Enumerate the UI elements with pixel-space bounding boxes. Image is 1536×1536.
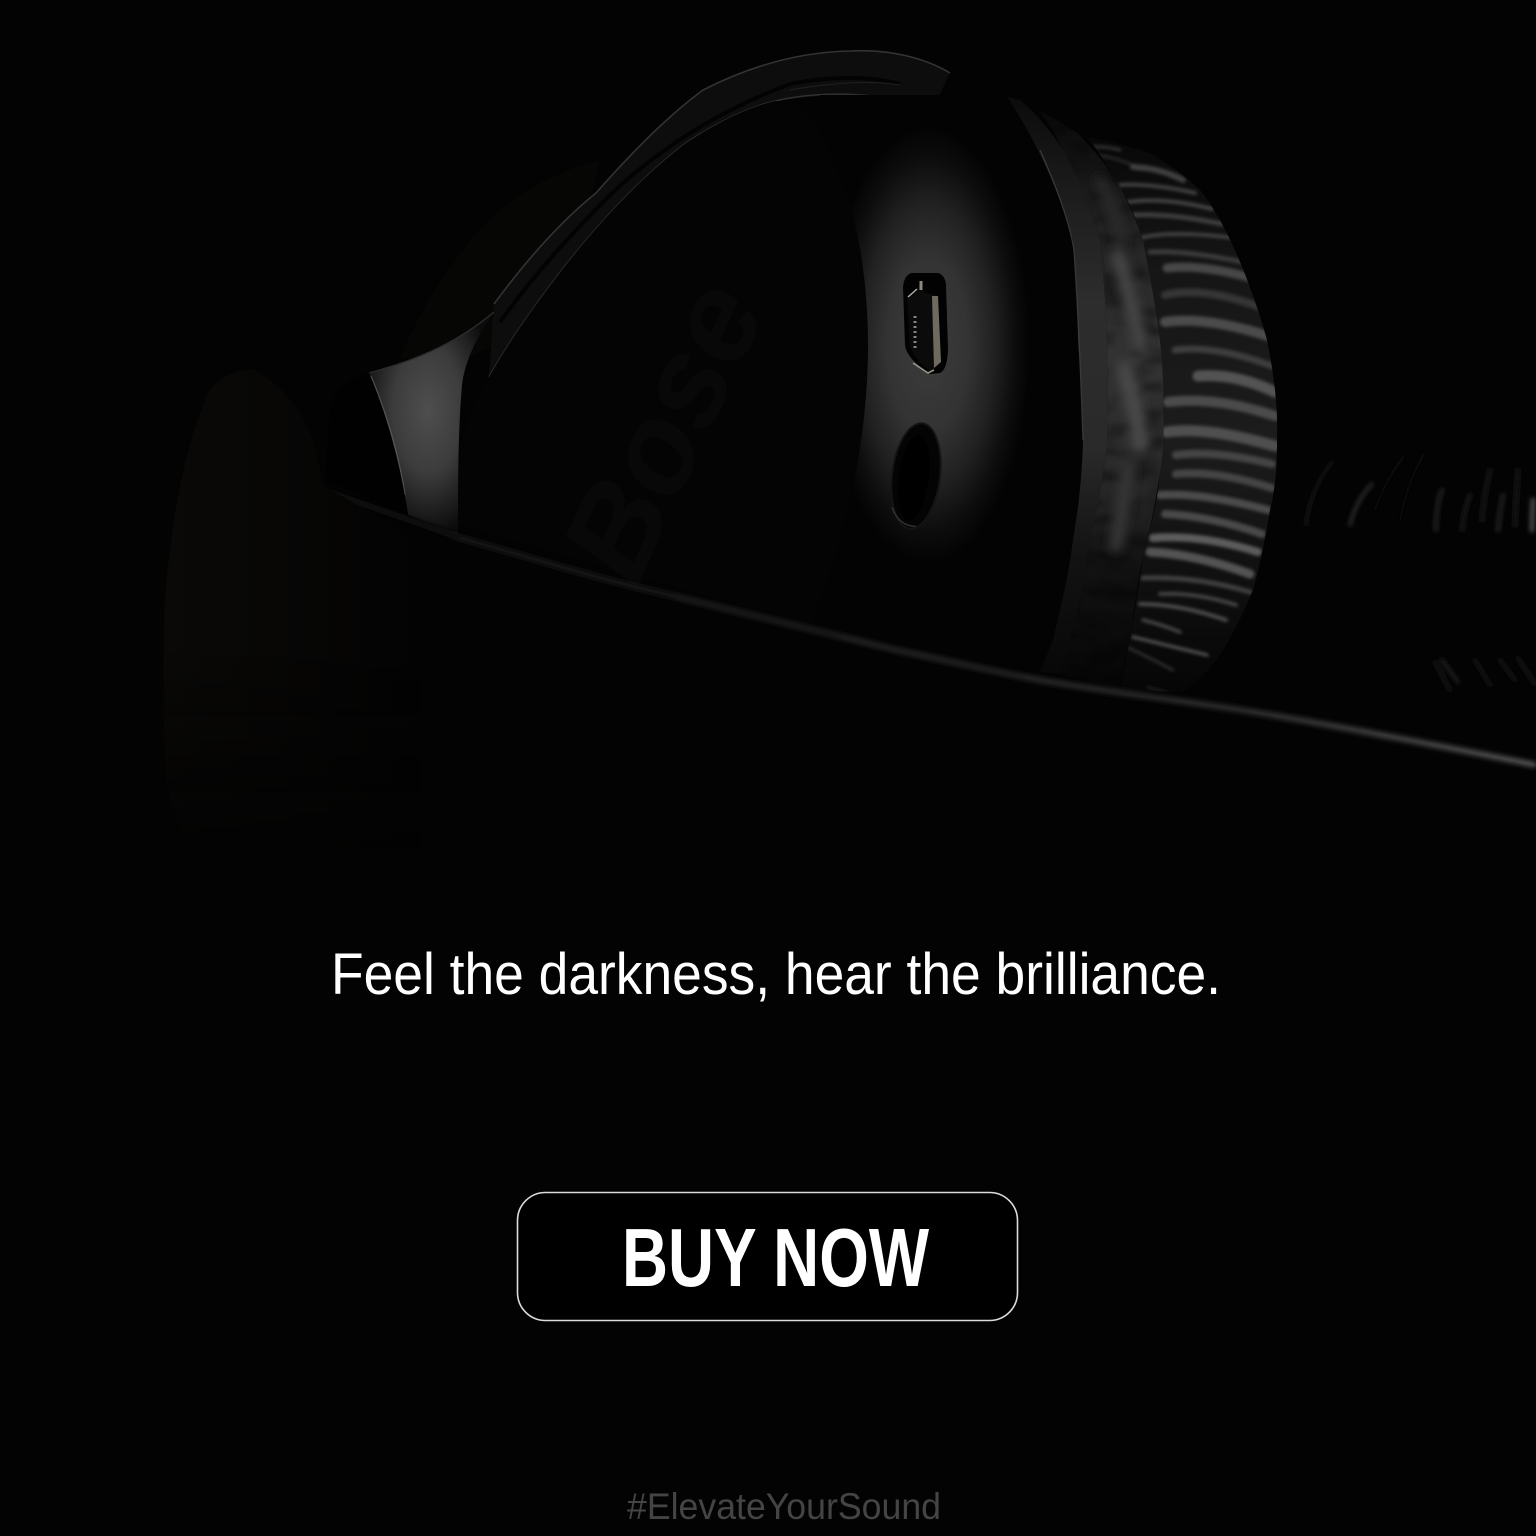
left lobe sheen	[1100, 180, 1140, 545]
metal cup band	[810, 95, 1040, 630]
dark recess by elbow	[325, 373, 408, 515]
pad wrinkle highlights	[1090, 147, 1275, 698]
leather ear pad	[1056, 130, 1278, 692]
micro USB port	[903, 273, 948, 374]
foreground surface	[0, 487, 1536, 1536]
hashtag: #ElevateYourSound	[627, 1486, 941, 1527]
brand logo, barely visible: Bose	[534, 261, 791, 600]
buy now button	[518, 1192, 1018, 1320]
poster	[332, 50, 1536, 1520]
tagline: Feel the darkness, hear the brilliance.	[331, 942, 1221, 1007]
metal elbow	[369, 312, 494, 535]
pad right lobe	[1087, 137, 1277, 692]
far ear cup	[320, 487, 355, 504]
headphones photo	[332, 50, 1536, 1312]
button label: BUY NOW	[622, 1211, 930, 1304]
faint disc behind headband	[400, 160, 600, 360]
headband highlights	[494, 51, 950, 304]
inner ear cup disc	[457, 101, 868, 625]
cup rim	[1007, 97, 1108, 674]
oval port	[885, 419, 947, 533]
pad left lobe	[1056, 130, 1164, 638]
headband	[489, 51, 950, 377]
cable behind pad	[1306, 452, 1535, 690]
button outline	[518, 1192, 1018, 1320]
